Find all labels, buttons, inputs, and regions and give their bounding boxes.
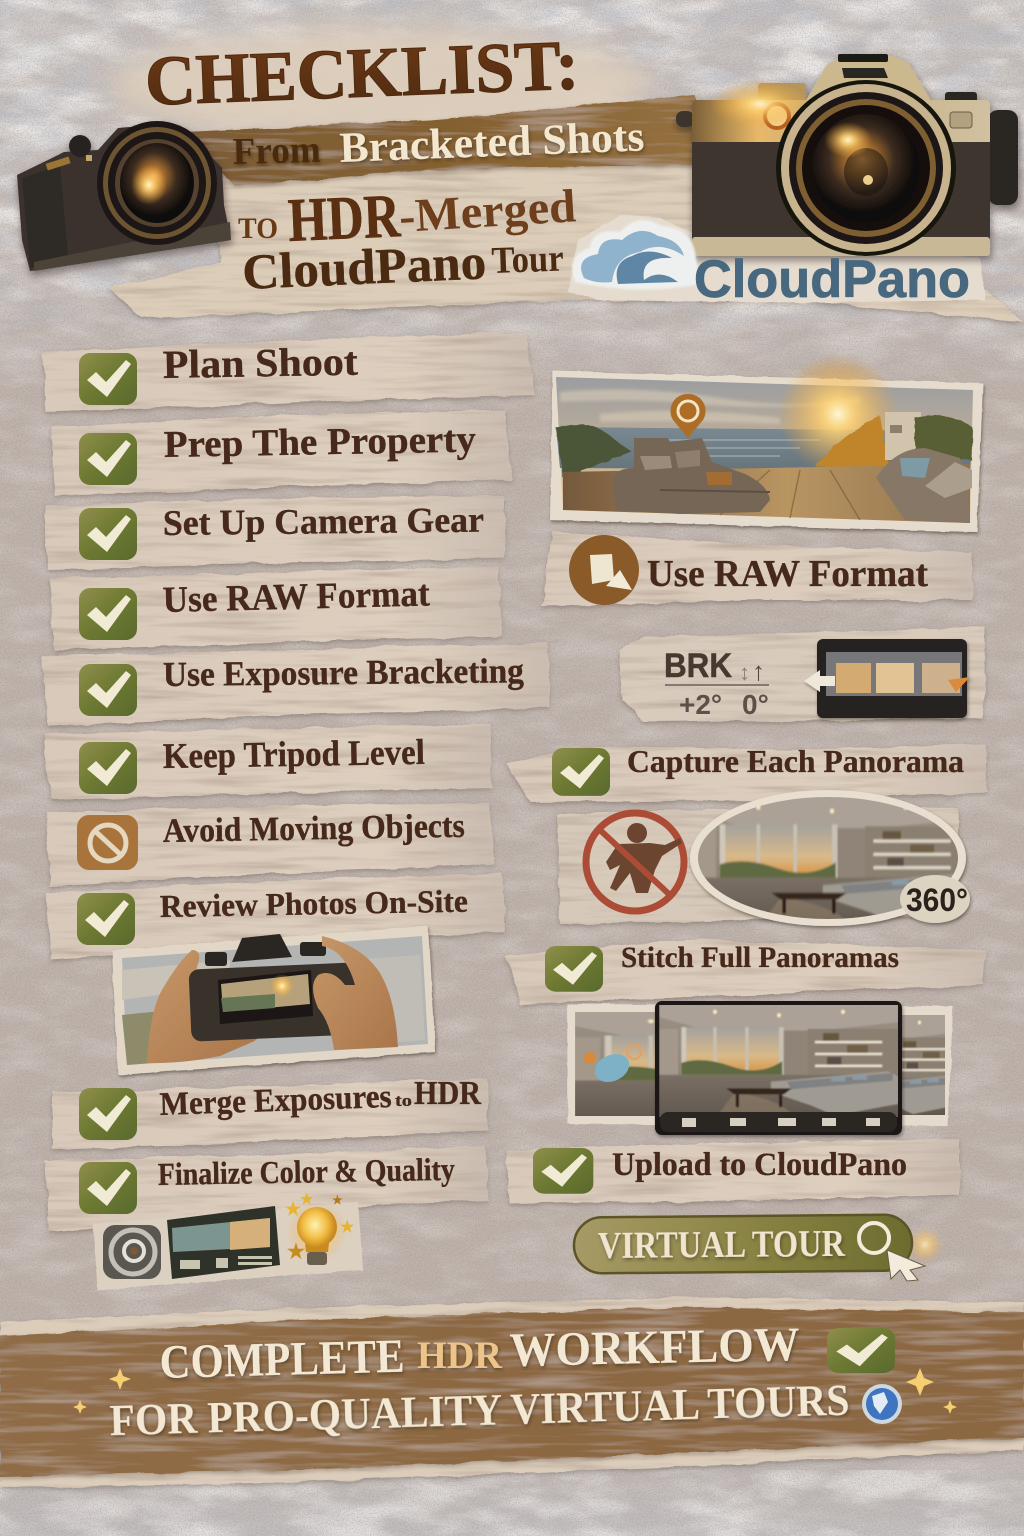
step: finalize color and quality: Finalize Color & Quality — [157, 1151, 455, 1192]
step: plan shoot: Plan Shoot — [162, 339, 359, 387]
subtitle: from bracketed shots: From — [232, 129, 321, 173]
icon: light bulb and stars — [285, 1192, 355, 1265]
step: plan shoot — [42, 332, 535, 412]
logo wordmark: CloudPano — [694, 250, 970, 309]
icon: light bulb and stars: ★ — [340, 1219, 355, 1236]
subtitle: to HDR-merged CloudPano tour: CloudPano — [241, 233, 487, 300]
left trees — [556, 424, 632, 478]
subtitle: to HDR-merged CloudPano tour — [238, 180, 577, 300]
step: stitch full panoramas — [506, 940, 985, 1004]
photo: stitched panorama on tablet — [567, 1000, 965, 1135]
photo: hands holding camera — [112, 926, 435, 1075]
text: complete HDR workflow: COMPLETE — [159, 1330, 405, 1389]
subtitle: to HDR-merged CloudPano tour: TO — [238, 212, 278, 245]
subtitle: to HDR-merged CloudPano tour: -Merged — [397, 180, 577, 243]
photo: 360 room — [690, 790, 970, 927]
screen: bracketed thumbnails — [804, 639, 970, 718]
icon: blue figure — [584, 1045, 641, 1087]
icon: cursor — [887, 1250, 925, 1281]
subtitle: to HDR-merged CloudPano tour: HDR — [287, 182, 402, 255]
step: use RAW format — [50, 566, 502, 650]
tablet — [655, 1000, 902, 1135]
text: complete HDR workflow: WORKFLOW — [509, 1318, 800, 1377]
panel: left checklist — [42, 332, 550, 1290]
BRK readout: ↕ — [739, 660, 750, 685]
icon: light bulb and stars: ★ — [285, 1199, 302, 1219]
step: merge exposures to HDR: to — [395, 1091, 412, 1110]
subtitle: to HDR-merged CloudPano tour: Tour — [491, 238, 564, 282]
icon: lens app — [103, 1225, 161, 1279]
panel: bracketing settings — [618, 627, 985, 722]
BRK readout: 0° — [742, 689, 769, 720]
icon: no people — [586, 813, 684, 911]
title: CHECKLIST: — [144, 26, 580, 121]
icon: avoid symbol — [77, 815, 138, 870]
panel: editing icons — [93, 1192, 363, 1290]
icon: left camera — [17, 121, 231, 271]
step: upload to CloudPano: Upload to CloudPano — [612, 1147, 907, 1183]
location pin — [670, 394, 706, 438]
step: avoid moving objects: Avoid Moving Objects — [162, 808, 465, 850]
text: complete HDR workflow — [159, 1318, 800, 1389]
icon: banner check — [827, 1328, 895, 1373]
subtitle: from bracketed shots: Bracketed Shots — [339, 113, 645, 172]
step: capture each panorama: Capture Each Panorama — [627, 743, 964, 779]
step: upload to CloudPano — [506, 1140, 960, 1204]
text: for pro-quality virtual tours: FOR PRO-QUALITY VIRTUAL TOURS — [109, 1375, 850, 1445]
panel: no motion and 360 view — [557, 790, 970, 927]
step: use RAW format (detail): Use RAW Format — [647, 553, 928, 595]
sea — [556, 427, 973, 470]
icon: light bulb and stars: ★ — [300, 1192, 314, 1208]
badge: 360: 360° — [906, 882, 968, 918]
logo: CloudPano — [572, 220, 970, 309]
icon: light bulb and stars: ★ — [287, 1241, 305, 1263]
step: use RAW format: Use RAW Format — [162, 573, 431, 621]
camera body — [189, 934, 359, 1042]
icon: right camera — [676, 54, 1018, 256]
step: finalize color and quality — [44, 1146, 488, 1232]
step: capture each panorama — [506, 743, 988, 802]
step: keep tripod level — [44, 724, 492, 800]
sparkles — [73, 1368, 957, 1414]
panel: header — [108, 26, 1024, 322]
BRK readout — [664, 647, 769, 720]
right trees and house — [815, 412, 973, 470]
left sofa — [613, 438, 770, 514]
right sofa — [876, 448, 970, 523]
photo: sunset terrace — [550, 354, 983, 532]
step: review photos on-site — [46, 872, 505, 960]
button: virtual tour — [574, 1215, 943, 1281]
panel: right column — [506, 354, 988, 1281]
icon: light bulb and stars: ★ — [332, 1193, 343, 1207]
panel: bottom banner — [0, 1297, 1024, 1488]
step: merge exposures to HDR: Merge Exposures — [159, 1079, 392, 1123]
clouds — [560, 390, 860, 424]
step: stitch full panoramas: Stitch Full Panoramas — [621, 941, 899, 974]
BRK readout: +2° — [679, 689, 722, 720]
step: review photos on-site: Review Photos On-Site — [159, 883, 468, 924]
icon: globe — [862, 1384, 902, 1424]
step: set up camera gear — [44, 496, 505, 570]
step: prep the property — [50, 410, 512, 496]
icon: RAW file — [569, 535, 639, 605]
step: merge exposures to HDR — [52, 1075, 488, 1150]
step: use RAW format (detail) — [542, 532, 973, 606]
step: use exposure bracketing: Use Exposure Bracketing — [163, 651, 525, 694]
BRK readout: ↑ — [752, 656, 765, 686]
right hand — [313, 936, 398, 1050]
step: use exposure bracketing — [42, 642, 550, 726]
step: set up camera gear: Set Up Camera Gear — [163, 500, 484, 543]
text: complete HDR workflow: HDR — [417, 1334, 503, 1377]
button: virtual tour: VIRTUAL TOUR — [598, 1223, 846, 1267]
BRK readout: BRK — [664, 647, 732, 685]
icon: magnifier — [859, 1223, 889, 1253]
icon: editing screen — [167, 1206, 280, 1279]
badge: 360 — [900, 875, 970, 923]
left hand — [147, 950, 260, 1063]
step: keep tripod level: Keep Tripod Level — [162, 732, 425, 776]
step: prep the property: Prep The Property — [163, 419, 476, 466]
step: avoid moving objects — [46, 802, 494, 886]
deck — [563, 464, 970, 523]
step: merge exposures to HDR: HDR — [414, 1075, 481, 1112]
sun glow — [778, 354, 898, 474]
